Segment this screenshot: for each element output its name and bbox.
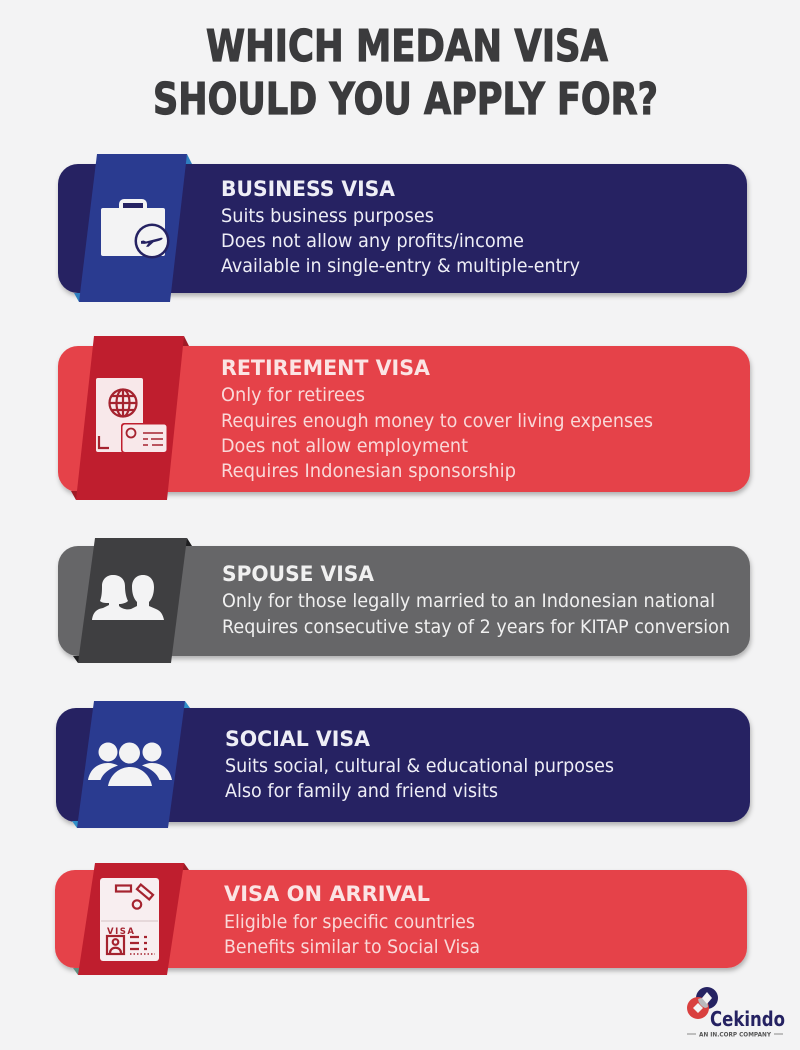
text: spouse visa: Only for those legally married to an Indonesian national	[222, 590, 715, 612]
icon: couple	[92, 575, 164, 620]
logo: cekindo: AN IN.CORP COMPANY	[699, 1032, 772, 1038]
panel: spouse visa	[58, 538, 750, 663]
text: retirement visa	[221, 356, 653, 482]
panel: social visa	[56, 701, 750, 828]
logo: cekindo	[687, 987, 785, 1038]
text: visa on arrival: VISA ON ARRIVAL	[224, 882, 430, 907]
text: social visa: Also for family and friend visits	[225, 780, 498, 802]
text: business visa: Suits business purposes	[221, 205, 434, 227]
text: retirement visa: Requires Indonesian sponsorship	[221, 460, 516, 482]
text: retirement visa: Only for retirees	[221, 384, 365, 406]
icon: visa page: VISA	[107, 927, 134, 937]
text: social visa: SOCIAL VISA	[225, 727, 370, 752]
text: retirement visa: Does not allow employment	[221, 435, 468, 457]
text: retirement visa: Requires enough money to cover living expenses	[221, 410, 653, 432]
text: business visa: BUSINESS VISA	[221, 177, 395, 202]
icon: visa page	[100, 878, 159, 961]
title	[153, 21, 658, 125]
logo: cekindo: Cekindo	[710, 1007, 785, 1031]
panel: retirement visa	[58, 336, 750, 500]
text: spouse visa: SPOUSE VISA	[222, 562, 374, 587]
title: WHICH MEDAN VISA	[206, 21, 608, 72]
text: business visa: Does not allow any profits/income	[221, 230, 524, 252]
panel: business visa	[58, 154, 747, 302]
text: business visa: Available in single-entry & multiple-entry	[221, 255, 580, 277]
icon: briefcase with plane	[101, 199, 170, 258]
icon: passport and id card	[96, 378, 168, 453]
text: social visa	[225, 727, 614, 802]
text: visa on arrival: Benefits similar to Social Visa	[224, 936, 480, 958]
text: visa on arrival	[224, 882, 480, 958]
title: SHOULD YOU APPLY FOR?	[153, 74, 658, 125]
text: spouse visa: Requires consecutive stay of 2 years for KITAP conversion	[222, 616, 730, 638]
text: business visa	[221, 177, 580, 277]
icon: group of people	[88, 742, 172, 786]
text: visa on arrival: Eligible for specific countries	[224, 911, 475, 933]
text: retirement visa: RETIREMENT VISA	[221, 356, 430, 381]
text: social visa: Suits social, cultural & educational purposes	[225, 755, 614, 777]
text: spouse visa	[222, 562, 730, 638]
panel: visa on arrival	[55, 863, 747, 975]
